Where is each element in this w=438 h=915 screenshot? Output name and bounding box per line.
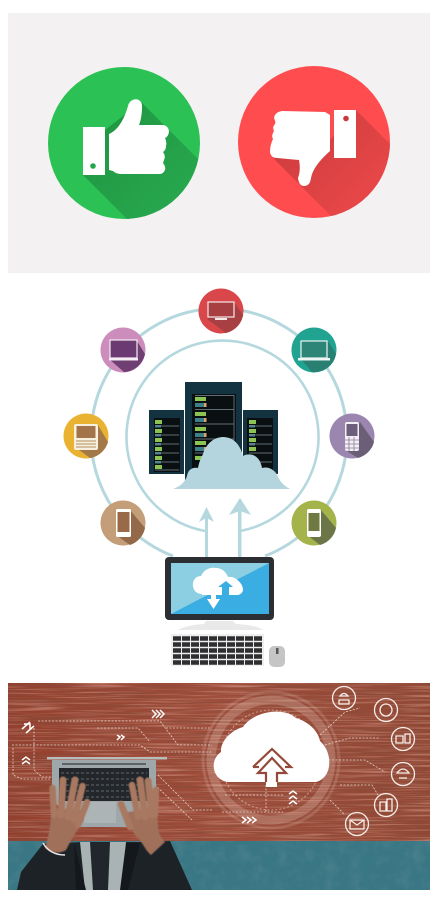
wood desk bbox=[8, 683, 430, 841]
device node: monitor red bbox=[198, 288, 244, 334]
device node: pda yellow bbox=[64, 414, 108, 458]
hands bbox=[45, 780, 165, 855]
left hand bbox=[45, 780, 87, 852]
laptop bbox=[47, 757, 167, 827]
panel: laptop and cloud upload photo bbox=[8, 683, 430, 890]
panel: thumbs up and thumbs down bbox=[8, 13, 430, 273]
circuit lines bbox=[12, 708, 385, 820]
service icon circles bbox=[332, 686, 414, 836]
cloud with arrow bbox=[214, 712, 329, 787]
stand bbox=[178, 621, 263, 630]
keyboard bbox=[171, 634, 264, 666]
monitor bbox=[165, 557, 274, 620]
mouse bbox=[269, 646, 285, 667]
device node: smartphone olive bbox=[292, 500, 336, 546]
outer and inner rings bbox=[91, 309, 347, 556]
icon: thumbs down bbox=[238, 66, 390, 218]
right hand bbox=[121, 780, 165, 855]
server racks bbox=[149, 382, 278, 482]
device node: laptop teal bbox=[292, 328, 336, 372]
chevrons bbox=[22, 710, 297, 823]
device node: smartphone tan bbox=[100, 500, 146, 546]
screen cloud icon bbox=[193, 568, 243, 595]
teal floor bbox=[8, 841, 430, 890]
desktop computer bbox=[165, 557, 285, 667]
cloud bbox=[173, 437, 290, 489]
glow rings bbox=[203, 692, 339, 828]
device node: monitor pink bbox=[100, 328, 146, 372]
shirt cuff bbox=[43, 843, 65, 855]
icon: thumbs up bbox=[48, 67, 200, 219]
businessman suit bbox=[17, 841, 192, 890]
device node: phone purple bbox=[330, 414, 374, 458]
upload arrows bbox=[199, 498, 251, 557]
panel: cloud network diagram bbox=[64, 288, 374, 667]
